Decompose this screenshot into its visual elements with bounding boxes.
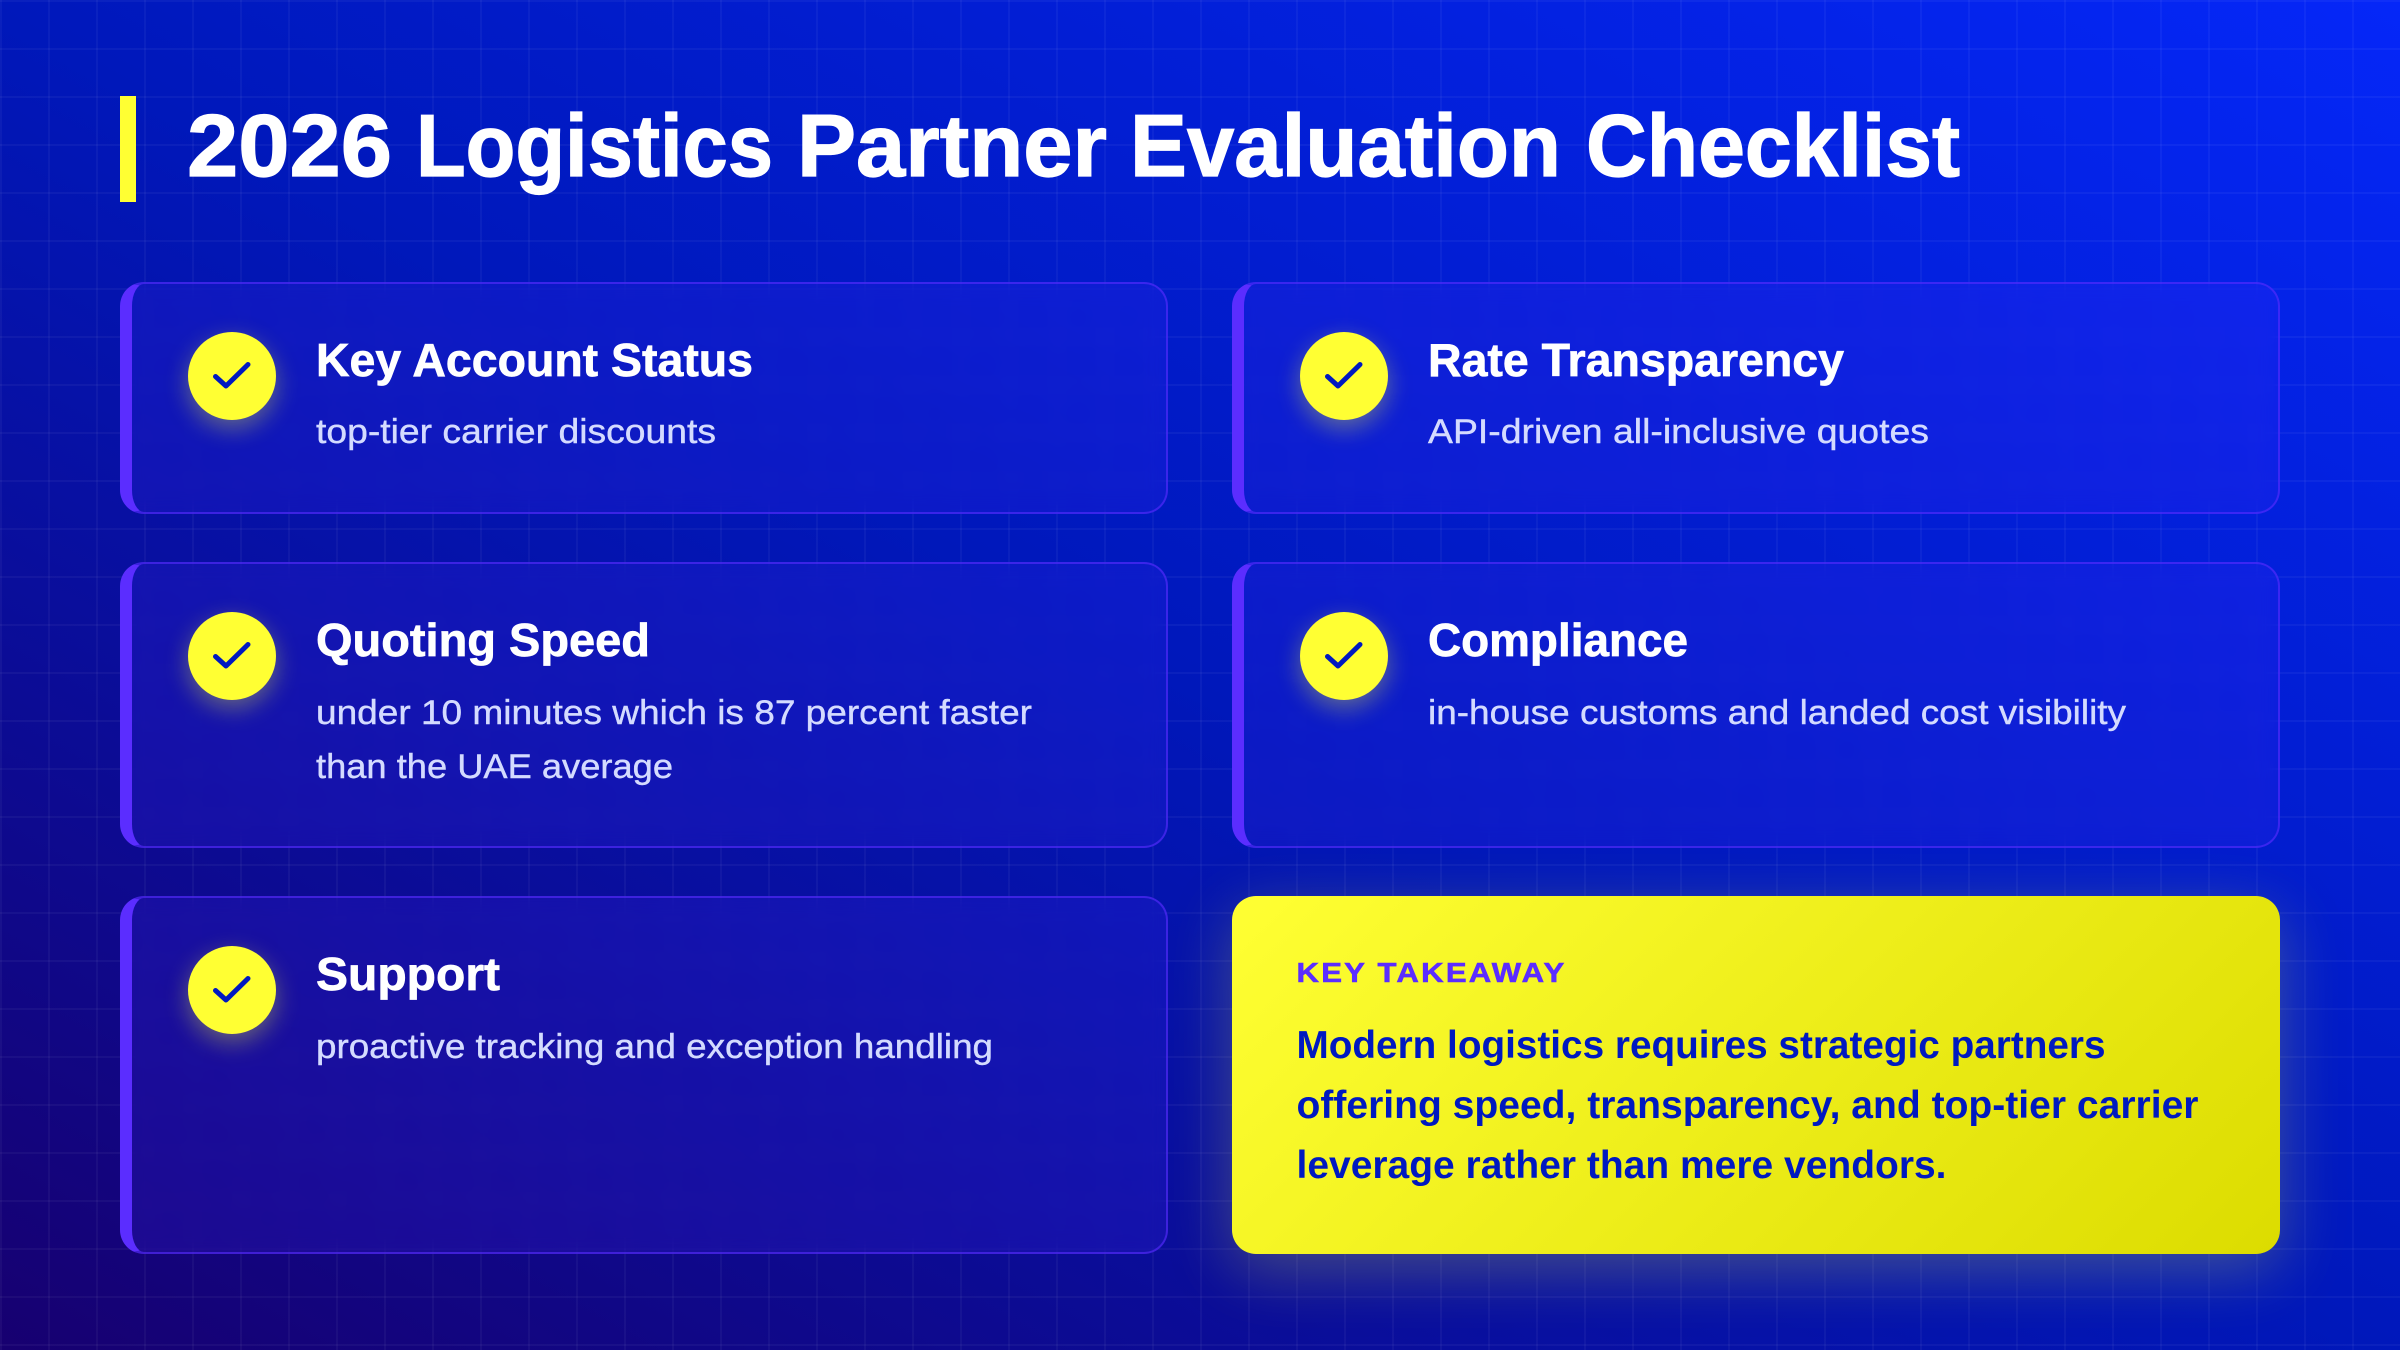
icon: check bbox=[1300, 332, 1388, 420]
callout: key takeaway bbox=[1232, 896, 2280, 1254]
text: key takeaway bbox=[1296, 957, 2198, 1187]
text: rate transparency: Rate Transparency bbox=[1428, 334, 1844, 386]
panel: quoting speed bbox=[120, 562, 1168, 848]
text: compliance: Compliance bbox=[1428, 614, 1688, 666]
text: key account status: top-tier carrier discounts bbox=[316, 413, 716, 451]
text: key account status: Key Account Status bbox=[316, 334, 753, 386]
panel: rate transparency bbox=[1232, 282, 2280, 514]
text: key takeaway: offering speed, transparency, and top-tier carrier bbox=[1296, 1084, 2198, 1127]
text: compliance: in-house customs and landed cost visibility bbox=[1428, 694, 2126, 732]
text: key takeaway: leverage rather than mere vendors. bbox=[1296, 1144, 1946, 1187]
title: Logistics bbox=[416, 96, 773, 195]
text: quoting speed: under 10 minutes which is 87 percent faster bbox=[316, 694, 1032, 732]
panel: support bbox=[120, 896, 1168, 1254]
title: Evaluation bbox=[1130, 96, 1561, 195]
title: 2026 bbox=[187, 96, 392, 195]
icon: check bbox=[188, 612, 276, 700]
text: support: proactive tracking and exception handling bbox=[316, 1028, 993, 1066]
text: key takeaway: KEY TAKEAWAY bbox=[1296, 957, 1566, 988]
text: quoting speed: Quoting Speed bbox=[316, 614, 650, 666]
icon: check bbox=[1300, 612, 1388, 700]
title bbox=[187, 96, 1960, 196]
text: rate transparency bbox=[1428, 334, 1929, 451]
text: compliance bbox=[1428, 614, 2126, 732]
text: quoting speed bbox=[316, 614, 1032, 786]
text: key account status bbox=[316, 334, 753, 451]
panel: compliance bbox=[1232, 562, 2280, 848]
title accent bar bbox=[120, 96, 136, 202]
panel: key account status bbox=[120, 282, 1168, 514]
text: quoting speed: than the UAE average bbox=[316, 748, 673, 786]
text: rate transparency: API-driven all-inclusive quotes bbox=[1428, 413, 1929, 451]
icon: check bbox=[188, 332, 276, 420]
icon: check bbox=[188, 946, 276, 1034]
title: Partner bbox=[797, 96, 1107, 195]
text: key takeaway: Modern logistics requires strategic partners bbox=[1296, 1024, 2106, 1067]
text: support bbox=[316, 948, 993, 1066]
title: Checklist bbox=[1586, 96, 1960, 195]
text: support: Support bbox=[316, 948, 500, 1000]
